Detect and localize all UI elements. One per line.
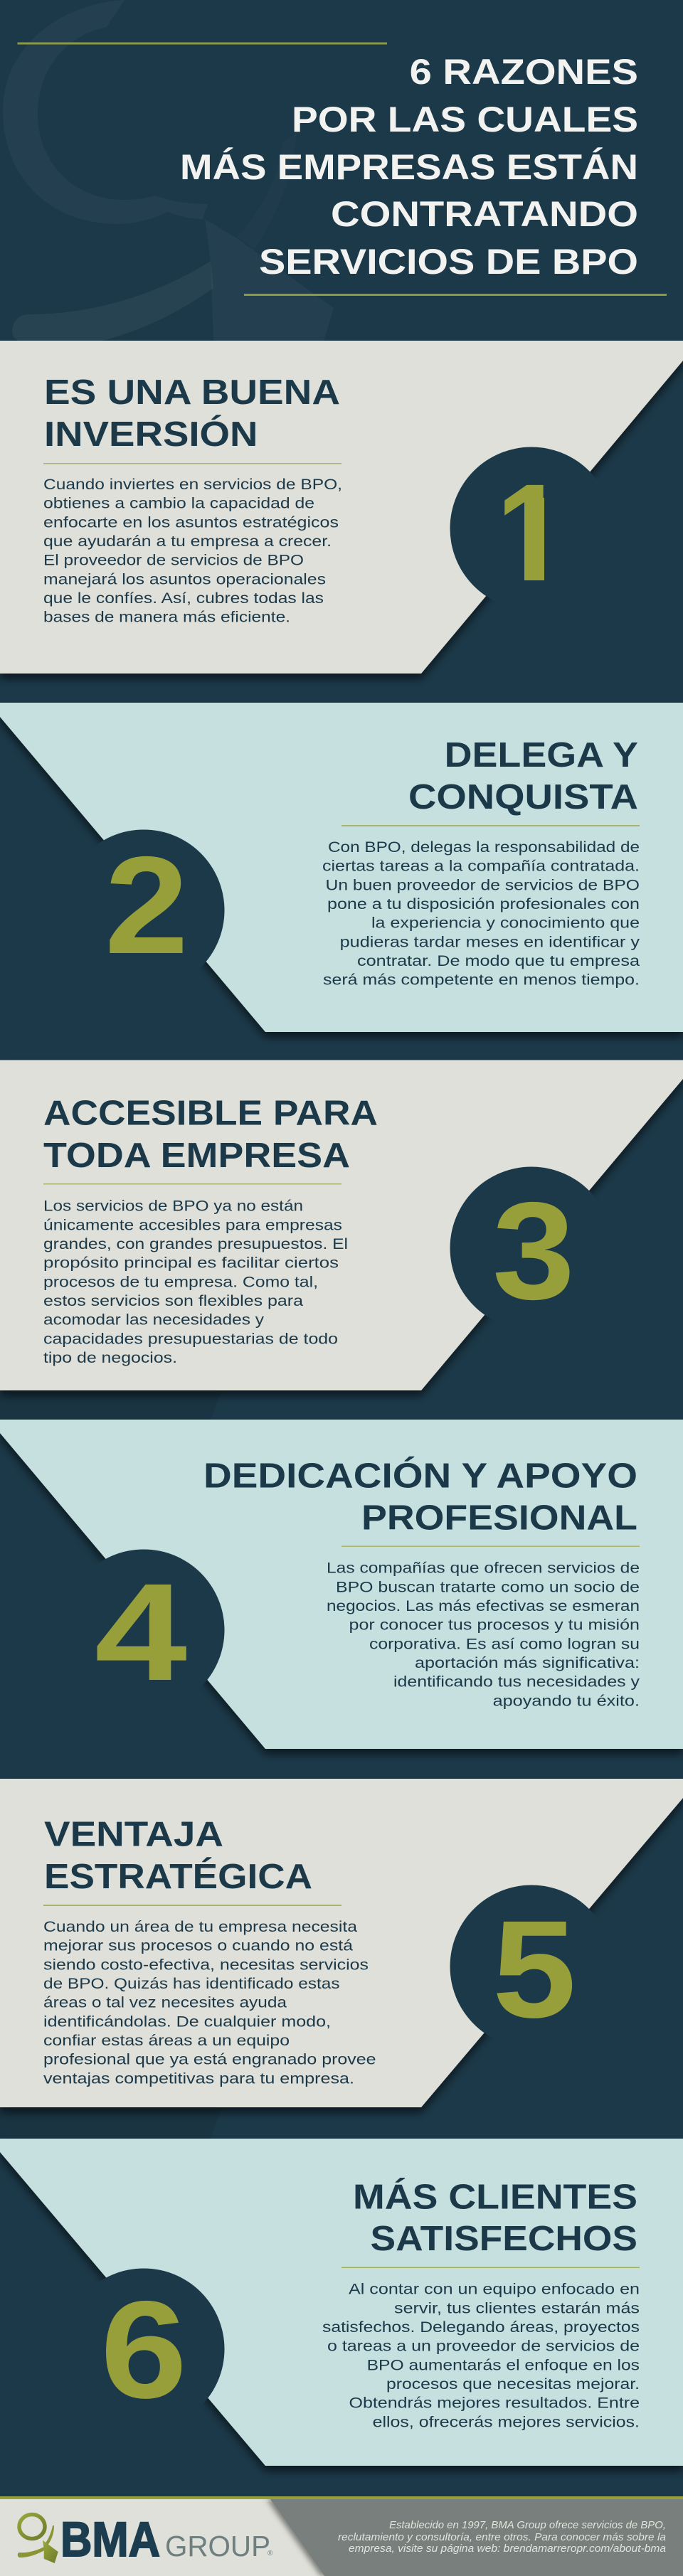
body text: satisfechos. Delegando áreas, proyectos xyxy=(322,2319,640,2336)
number 3: 3 xyxy=(492,1173,575,1329)
body text: mejorar sus procesos o cuando no está xyxy=(43,1938,353,1954)
body text: enfocarte en los asuntos estratégicos xyxy=(43,514,339,531)
panel 5: ventaja estratégica xyxy=(0,1779,683,2107)
body text: El proveedor de servicios de BPO xyxy=(43,553,304,569)
body text: identificándolas. De cualquier modo, xyxy=(43,2013,331,2030)
body text: BPO aumentarás el enfoque en los xyxy=(367,2357,640,2373)
body text: procesos de tu empresa. Como tal, xyxy=(43,1274,318,1290)
company description: empresa, visite su página web: brendamarreropr.com/about-bma xyxy=(349,2543,666,2555)
number 5: 5 xyxy=(492,1892,576,2047)
body text: áreas o tal vez necesites ayuda xyxy=(43,1995,287,2011)
heading xyxy=(44,373,340,454)
body text: acomodar las necesidades y xyxy=(43,1312,265,1329)
body text xyxy=(327,1560,640,1709)
heading xyxy=(43,1095,378,1175)
title: MÁS EMPRESAS ESTÁN xyxy=(180,147,638,187)
heading: VENTAJA xyxy=(44,1816,223,1854)
heading: DELEGA Y xyxy=(445,736,638,775)
body text: que ayudarán a tu empresa a crecer. xyxy=(43,533,332,550)
heading: TODA EMPRESA xyxy=(43,1137,350,1175)
heading: PROFESIONAL xyxy=(361,1499,637,1538)
body text: ventajas competitivas para tu empresa. xyxy=(43,2070,354,2087)
heading xyxy=(353,2178,637,2258)
number 6: 6 xyxy=(100,2272,187,2427)
body text xyxy=(43,477,342,626)
heading: DEDICACIÓN Y APOYO xyxy=(203,1457,637,1496)
body text: capacidades presupuestarias de todo xyxy=(43,1331,338,1347)
body text: de BPO. Quizás has identificado estas xyxy=(43,1976,340,1992)
body text: siendo costo-efectiva, necesitas servicios xyxy=(43,1957,369,1973)
body text: obtienes a cambio la capacidad de xyxy=(43,496,314,512)
number circle xyxy=(63,829,225,991)
body text: la experiencia y conocimiento que xyxy=(371,915,640,932)
body text: Con BPO, delegas la responsabilidad de xyxy=(328,839,640,856)
top rule xyxy=(17,43,387,44)
panel 4: dedicación y apoyo profesional xyxy=(0,1420,683,1749)
panel shape xyxy=(0,703,683,1032)
body text: pudieras tardar meses en identificar y xyxy=(340,934,640,950)
title: 6 RAZONES xyxy=(410,52,638,92)
body text: contratar. De modo que tu empresa xyxy=(357,953,640,969)
body text: tipo de negocios. xyxy=(43,1350,177,1366)
rule xyxy=(342,1546,640,1547)
body text: ellos, ofrecerás mejores servicios. xyxy=(373,2414,640,2430)
watermark: magnifier and tie xyxy=(3,0,334,341)
body text: bases de manera más eficiente. xyxy=(43,610,290,626)
title: SERVICIOS DE BPO xyxy=(259,242,638,282)
footer cream background xyxy=(0,2499,683,2576)
body text: ciertas tareas a la compañía contratada. xyxy=(322,858,640,875)
body text: apoyando tu éxito. xyxy=(493,1693,640,1709)
body text: identificando tus necesidades y xyxy=(393,1674,640,1691)
panel shape xyxy=(0,2139,683,2466)
body text: grandes, con grandes presupuestos. El xyxy=(43,1236,348,1252)
footer xyxy=(0,2496,683,2576)
body text xyxy=(43,1198,348,1366)
rule xyxy=(43,1183,342,1185)
green divider xyxy=(0,2496,683,2499)
number circle xyxy=(450,1166,613,1330)
header xyxy=(3,0,667,341)
number 1: 1 xyxy=(496,455,567,610)
bottom rule xyxy=(244,294,667,296)
body text: será más competente en menos tiempo. xyxy=(323,972,640,989)
body text xyxy=(43,1919,376,2087)
number circle xyxy=(450,447,613,610)
body text: Al contar con un equipo enfocado en xyxy=(349,2282,640,2298)
band shade below panel 5 xyxy=(0,2107,222,2139)
company description: Establecido en 1997, BMA Group ofrece servicios de BPO, xyxy=(389,2519,666,2531)
body text: estos servicios son flexibles para xyxy=(43,1293,303,1309)
number 2: 2 xyxy=(105,828,189,983)
logo wordmark BMA: BMA xyxy=(60,2512,160,2567)
body text: profesional que ya está engranado provee xyxy=(43,2052,376,2068)
heading: SATISFECHOS xyxy=(370,2220,637,2258)
company description xyxy=(338,2519,666,2555)
body text: por conocer tus procesos y tu misión xyxy=(349,1617,640,1634)
rule xyxy=(43,1905,342,1906)
panel 3: accesible para toda empresa xyxy=(0,1060,683,1390)
body text: Cuando un área de tu empresa necesita xyxy=(43,1919,357,1935)
title xyxy=(180,52,638,282)
logo icon xyxy=(18,2515,58,2563)
heading: ACCESIBLE PARA xyxy=(43,1095,378,1133)
number 1 xyxy=(504,485,544,580)
band shade below panel 3 xyxy=(0,1390,222,1420)
body text: confiar estas áreas a un equipo xyxy=(43,2033,290,2049)
heading: ESTRATÉGICA xyxy=(44,1858,312,1896)
panel 2: delega y conquista xyxy=(0,703,683,1032)
body text: servir, tus clientes estarán más xyxy=(394,2300,640,2316)
body text: o tareas a un proveedor de servicios de xyxy=(327,2338,640,2355)
number circle xyxy=(63,1549,225,1711)
panel shape xyxy=(0,1779,683,2107)
body text: BPO buscan tratarte como un socio de xyxy=(336,1579,640,1595)
footer gray panel xyxy=(270,2499,683,2576)
title: CONTRATANDO xyxy=(331,194,638,234)
heading: MÁS CLIENTES xyxy=(353,2178,637,2217)
body text xyxy=(322,2282,640,2430)
heading xyxy=(408,736,638,816)
body text: Obtendrás mejores resultados. Entre xyxy=(349,2395,640,2412)
number 4: 4 xyxy=(95,1555,187,1710)
heading xyxy=(203,1457,637,1538)
registered mark: ® xyxy=(268,2550,273,2558)
panel 1: es una buena inversión xyxy=(0,341,683,674)
body text: corporativa. Es así como logran su xyxy=(369,1636,640,1652)
number circle xyxy=(63,2269,225,2429)
rule xyxy=(342,825,640,826)
body text: que le confíes. Así, cubres todas las xyxy=(43,590,324,607)
number circle xyxy=(450,1885,613,2048)
heading: ES UNA BUENA xyxy=(44,373,340,412)
logo: BMA Group xyxy=(18,2512,273,2567)
body text: Las compañías que ofrecen servicios de xyxy=(327,1560,640,1577)
rule xyxy=(342,2267,640,2268)
panel shape xyxy=(0,1060,683,1390)
body text: Los servicios de BPO ya no están xyxy=(43,1198,303,1215)
body text: manejará los asuntos operacionales xyxy=(43,571,326,587)
body text: pone a tu disposición profesionales con xyxy=(327,896,640,912)
body text: procesos que necesitas mejorar. xyxy=(386,2376,640,2393)
company description: reclutamiento y consultoría, entre otros. Para conocer más sobre la xyxy=(338,2531,666,2543)
body text: Un buen proveedor de servicios de BPO xyxy=(326,877,640,893)
title: POR LAS CUALES xyxy=(292,100,638,139)
heading: INVERSIÓN xyxy=(44,415,258,454)
body text: propósito principal es facilitar ciertos xyxy=(43,1255,339,1272)
logo wordmark GROUP: GROUP xyxy=(165,2530,270,2562)
body text: negocios. Las más efectivas se esmeran xyxy=(327,1598,640,1614)
body text: únicamente accesibles para empresas xyxy=(43,1217,342,1233)
heading: CONQUISTA xyxy=(408,778,638,816)
panel 6: más clientes satisfechos xyxy=(0,2139,683,2466)
heading xyxy=(44,1816,312,1896)
body text xyxy=(322,839,640,989)
panel shape xyxy=(0,341,683,674)
body text: aportación más significativa: xyxy=(415,1655,640,1671)
body text: Cuando inviertes en servicios de BPO, xyxy=(43,477,342,493)
panel shape xyxy=(0,1420,683,1749)
rule xyxy=(43,463,342,464)
